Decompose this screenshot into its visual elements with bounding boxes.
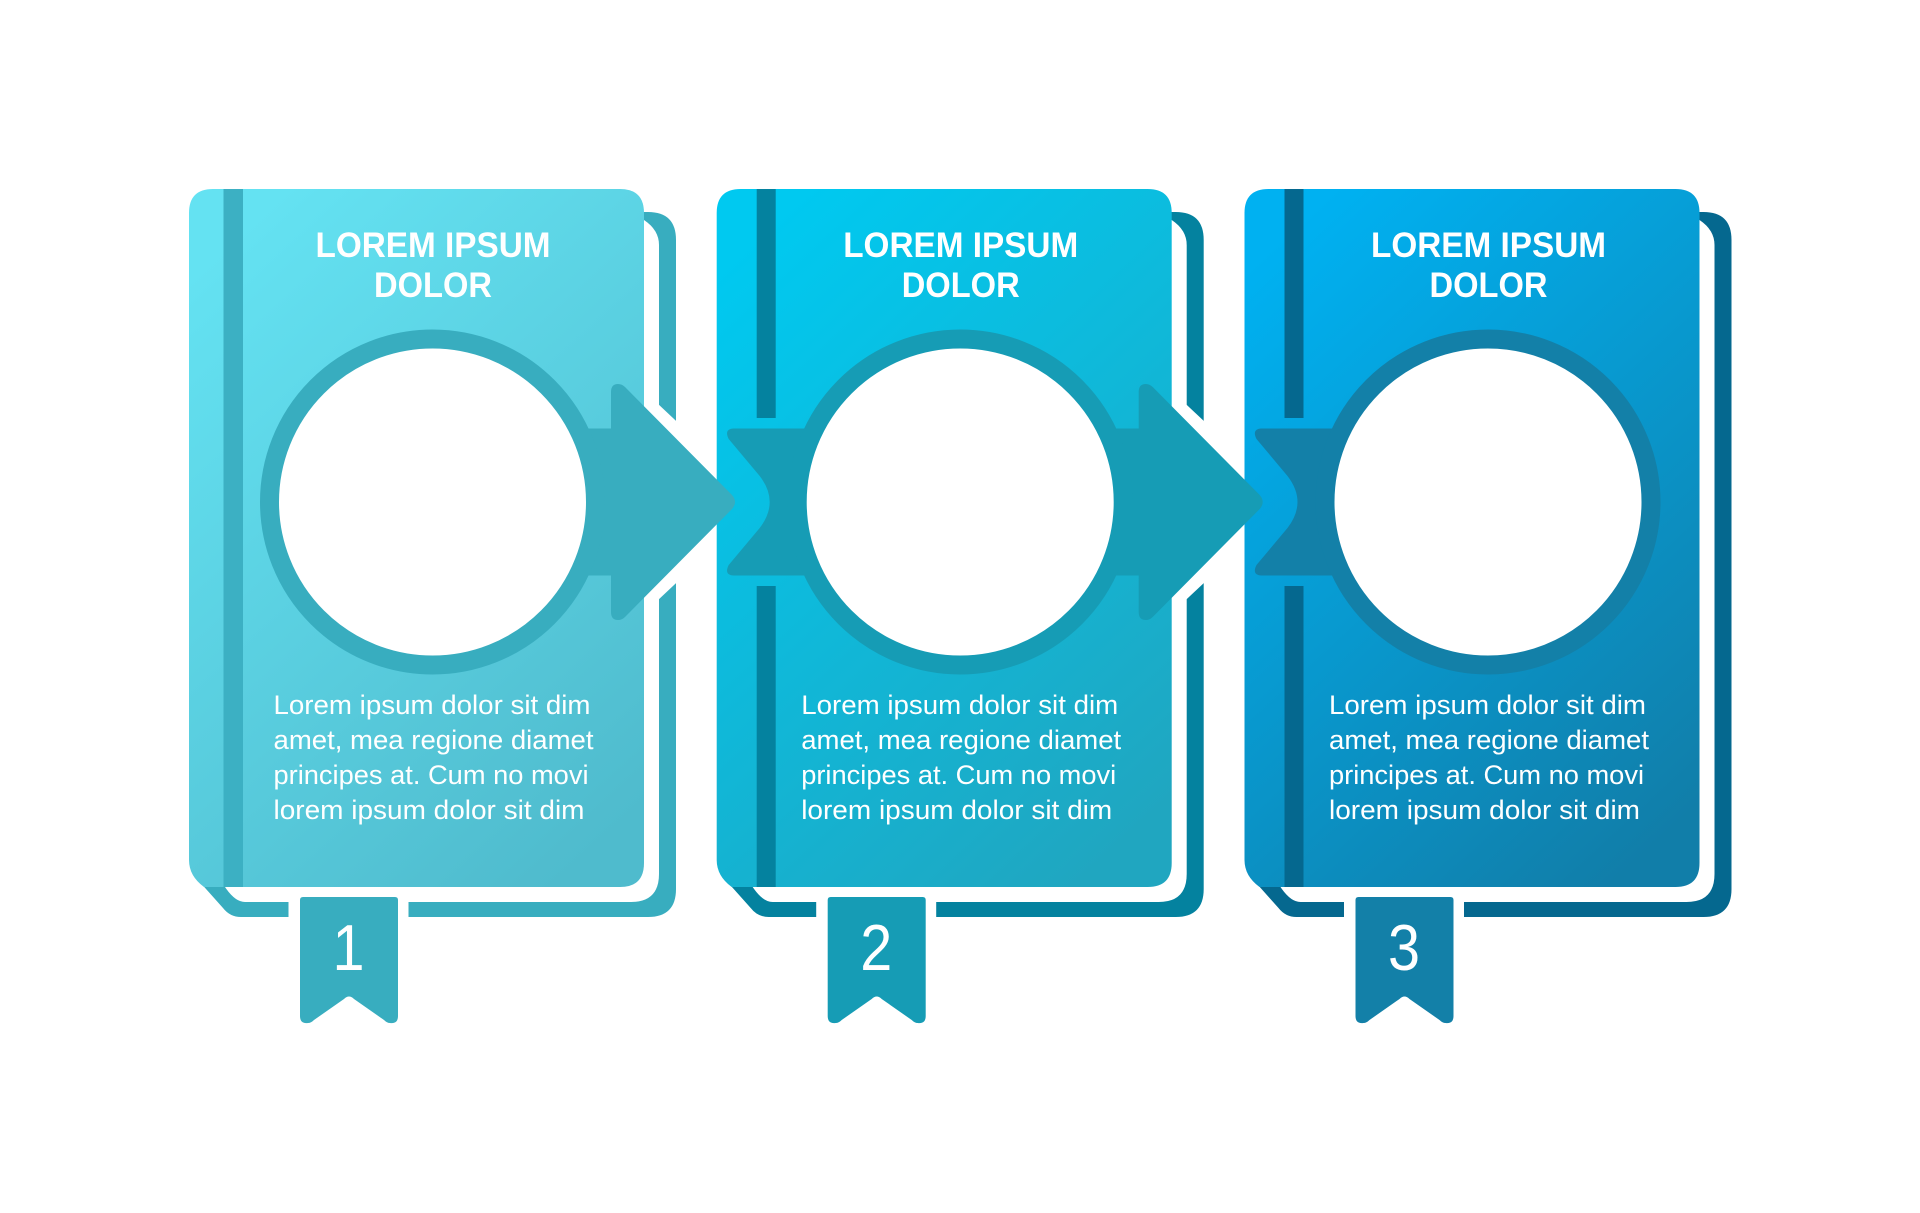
heading: DOLOR — [1430, 266, 1548, 305]
bookmark with number 3 — [1356, 897, 1454, 1023]
heading: DOLOR — [374, 266, 492, 305]
body text: amet, mea regione diamet — [1329, 725, 1650, 755]
book front cover — [189, 189, 644, 887]
arrow tail — [727, 428, 828, 576]
book back cover — [726, 212, 1204, 917]
body text: principes at. Cum no movi — [801, 760, 1116, 790]
body text: Lorem ipsum dolor sit dim — [801, 690, 1118, 720]
body text: principes at. Cum no movi — [1329, 760, 1644, 790]
heading: DOLOR — [902, 266, 1020, 305]
arrow to step 3 — [1068, 384, 1263, 620]
body text: Lorem ipsum dolor sit dim — [274, 690, 590, 720]
bookmark with number 2: 2 — [860, 911, 892, 984]
body text: lorem ipsum dolor sit dim — [274, 795, 584, 825]
body text: amet, mea regione diamet — [274, 725, 594, 755]
heading: LOREM IPSUM — [316, 226, 550, 265]
white cut behind arrow — [1168, 387, 1218, 617]
image circle — [1325, 339, 1651, 665]
panel: step 1 book — [189, 189, 735, 1023]
image circle — [797, 339, 1123, 665]
arrow to step 2 — [540, 384, 735, 620]
panel: step 2 book — [717, 189, 1263, 1023]
panel: step 3 book — [1244, 189, 1732, 1023]
white cut behind arrow — [640, 387, 690, 617]
book front cover — [1244, 189, 1700, 887]
spine strip — [1284, 189, 1304, 887]
body text: amet, mea regione diamet — [801, 725, 1122, 755]
body text: lorem ipsum dolor sit dim — [801, 795, 1112, 825]
bookmark with number 1: 1 — [332, 911, 364, 984]
book back cover — [198, 212, 676, 917]
spine strip — [757, 189, 776, 887]
book back cover — [1254, 212, 1732, 917]
image circle — [270, 339, 596, 665]
arrow tail — [1255, 428, 1356, 576]
body text: principes at. Cum no movi — [274, 760, 588, 790]
spine strip — [224, 189, 243, 887]
book front cover — [717, 189, 1172, 887]
heading: LOREM IPSUM — [1371, 226, 1606, 265]
bookmark with number 2 — [828, 897, 926, 1023]
bookmark with number 3: 3 — [1388, 911, 1420, 984]
body text: Lorem ipsum dolor sit dim — [1329, 690, 1646, 720]
heading: LOREM IPSUM — [843, 226, 1078, 265]
bookmark with number 1 — [300, 897, 398, 1023]
body text: lorem ipsum dolor sit dim — [1329, 795, 1640, 825]
